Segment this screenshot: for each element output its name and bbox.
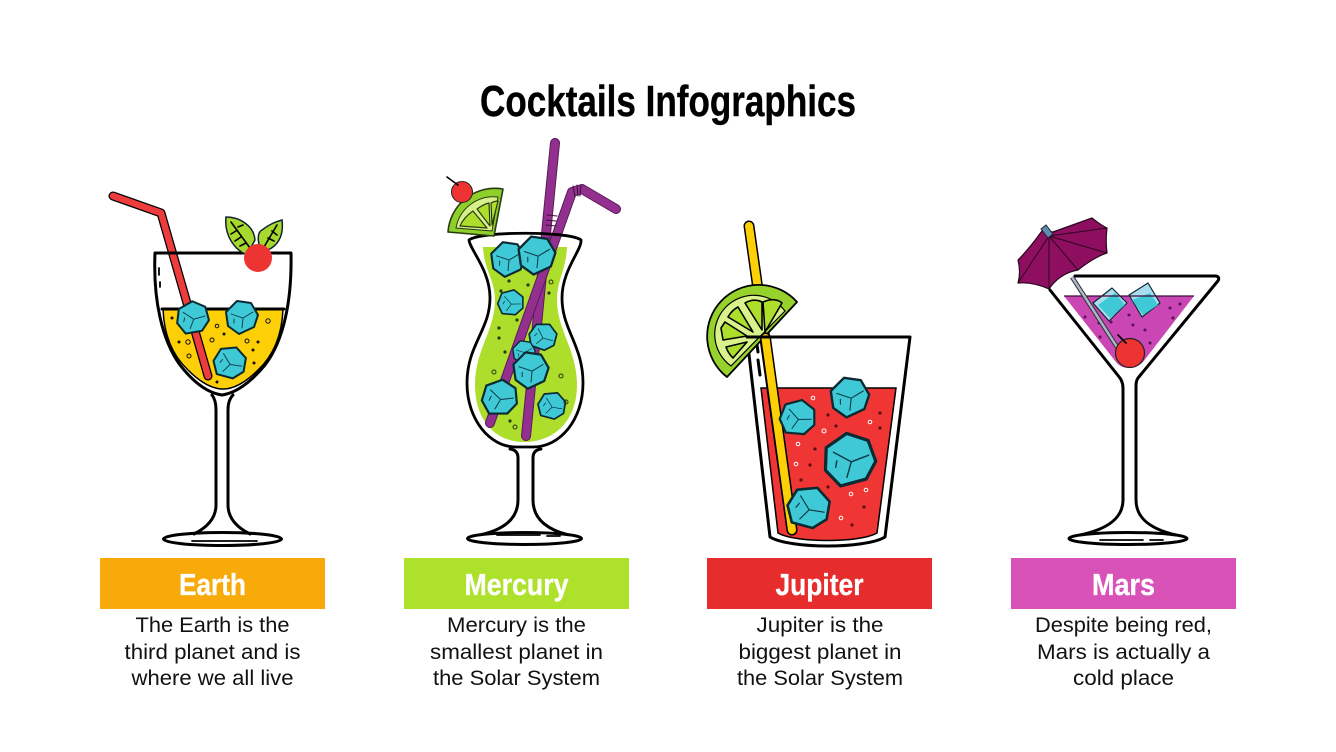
- straw: yellow: [749, 226, 792, 530]
- straw: yellow lower overlap: [766, 338, 792, 530]
- liquid: red drink: [761, 388, 896, 540]
- ice cubes: [1093, 283, 1160, 321]
- text: Earth description: [124, 614, 300, 690]
- text: Mercury description: smallest planet in: [430, 641, 603, 664]
- label: Earth: Earth: [179, 567, 246, 602]
- text: Mars description: cold place: [1073, 667, 1174, 690]
- ice cubes: [173, 298, 258, 386]
- text: Earth description: The Earth is the: [136, 614, 290, 637]
- text: Jupiter description: biggest planet in: [738, 641, 902, 664]
- text: Jupiter description: [737, 614, 903, 690]
- ice cubes: [773, 378, 880, 538]
- liquid: pink drink: [1064, 296, 1194, 368]
- panel: Mercury cocktail: [447, 143, 616, 544]
- label: Jupiter: Jupiter: [776, 567, 864, 602]
- bubbles: [492, 279, 568, 429]
- umbrella stick: [1072, 277, 1117, 347]
- panel: Jupiter cocktail: [707, 226, 910, 546]
- ice cubes: [476, 237, 571, 426]
- label: Jupiter: [707, 558, 932, 609]
- label: Mars: Mars: [1092, 567, 1155, 602]
- text: Mars description: Mars is actually a: [1037, 641, 1210, 664]
- liquid surface line: [1064, 295, 1194, 297]
- glass outline: [155, 253, 291, 546]
- panel: Mars cocktail: [1018, 218, 1219, 544]
- bubbles: [794, 396, 882, 527]
- liquid surface line: [162, 308, 284, 310]
- text: Earth description: where we all live: [130, 667, 294, 690]
- text: Jupiter description: Jupiter is the: [756, 614, 884, 637]
- label: Mercury: [404, 558, 629, 609]
- liquid: green drink: [475, 247, 577, 442]
- text: Jupiter description: the Solar System: [737, 667, 903, 690]
- bubbles: [1084, 302, 1182, 344]
- text: Mercury description: the Solar System: [433, 667, 600, 690]
- garnish: lime and cherry: [447, 177, 503, 236]
- straw: red: [113, 196, 208, 376]
- label: Mercury: Mercury: [464, 567, 569, 602]
- straws: purple: [490, 143, 616, 436]
- label: Earth: [100, 558, 325, 609]
- glass rim over lime: [747, 336, 785, 338]
- bubbles: [170, 316, 270, 384]
- garnish: lime wedge: [707, 285, 797, 377]
- text: Mercury description: [430, 614, 603, 690]
- glass outline: [1050, 276, 1219, 544]
- text: Mars description: [1035, 614, 1212, 690]
- glass outline: [747, 337, 910, 546]
- cherry: [1116, 335, 1144, 368]
- glass highlight dashes: [757, 345, 760, 375]
- title: Cocktails Infographics: [480, 77, 856, 126]
- label: Mars: [1011, 558, 1236, 609]
- panel: Earth cocktail: [113, 196, 291, 546]
- text: Earth description: third planet and is: [124, 641, 300, 664]
- liquid: yellow drink: [163, 309, 283, 389]
- text: Mercury description: Mercury is the: [447, 614, 586, 637]
- glass outline: [467, 233, 583, 544]
- umbrella stick highlight: [1072, 277, 1117, 347]
- garnish: leaves and cherry: [226, 217, 282, 272]
- text: Mars description: Despite being red,: [1035, 614, 1212, 637]
- cocktail umbrella: [1018, 218, 1107, 289]
